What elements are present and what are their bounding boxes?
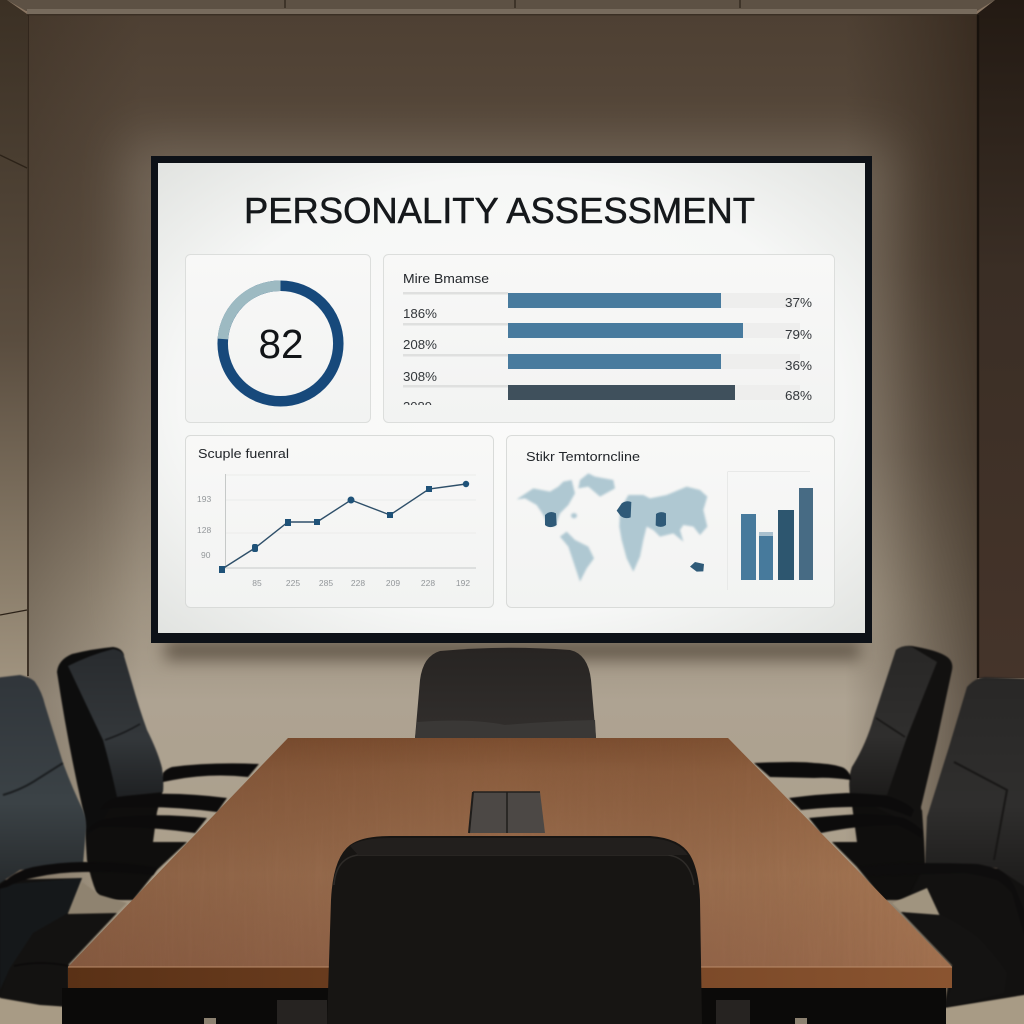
seat back side band xyxy=(57,647,124,835)
mini bar chart xyxy=(728,472,813,590)
data line xyxy=(222,484,466,569)
screen glow and shadow xyxy=(125,140,895,660)
chair: near side centre xyxy=(327,836,702,1024)
y-axis labels: 193 xyxy=(197,494,211,504)
table front edge xyxy=(68,967,952,988)
seat back xyxy=(925,677,1024,890)
chart axes and gridlines xyxy=(226,475,476,533)
arm rest xyxy=(0,862,157,890)
arm rest xyxy=(859,863,1024,955)
chair body underlay xyxy=(0,878,82,1006)
left labels and rules: 186% xyxy=(403,306,437,321)
donut chart xyxy=(223,286,338,401)
chair body underlay xyxy=(901,865,1024,1008)
gap of floor under arm xyxy=(68,882,127,914)
bars heading: Mire Bmamse xyxy=(403,271,489,286)
left labels and rules: 308% xyxy=(403,369,437,384)
bar percentages: 36% xyxy=(785,358,812,373)
under-table shadow and chair bases xyxy=(62,988,946,1024)
bar percentages xyxy=(785,295,812,403)
panel: line chart xyxy=(186,436,494,608)
panel: horizontal bars xyxy=(384,254,834,422)
seat back xyxy=(68,649,163,797)
seat xyxy=(901,912,1007,1008)
score value: 82 xyxy=(258,321,304,367)
chair: right front xyxy=(859,677,1024,1008)
bar fills xyxy=(508,293,743,400)
gap of floor under arm xyxy=(892,888,940,916)
map heading: Stikr Temtorncline xyxy=(526,449,640,464)
panel: world map and mini bars xyxy=(506,436,834,608)
x-axis labels: 85 xyxy=(252,578,262,588)
seat back xyxy=(849,646,952,830)
chair: left front xyxy=(0,675,157,1008)
bar percentages: 37% xyxy=(785,295,812,310)
seat and lower body xyxy=(832,790,926,900)
line chart heading: Scuple fuenral xyxy=(198,446,289,461)
left labels and rules: 2089 xyxy=(403,399,432,414)
bar tracks xyxy=(508,293,800,400)
chair: left rear xyxy=(57,647,259,900)
seat xyxy=(0,913,117,1008)
screen frame xyxy=(151,156,872,643)
conference table xyxy=(60,738,960,988)
seat back xyxy=(0,675,86,887)
left labels and rules xyxy=(403,292,508,414)
seat and lower body xyxy=(83,790,187,900)
left labels and rules: 208% xyxy=(403,337,437,352)
chair: centre far side xyxy=(415,648,596,738)
map markers xyxy=(545,501,704,572)
x-axis labels: 228 xyxy=(421,578,435,588)
screen surface xyxy=(158,163,865,633)
table top xyxy=(68,738,952,967)
x-axis labels: 228 xyxy=(351,578,365,588)
right wall panel xyxy=(977,0,1024,678)
panel: score donut xyxy=(186,254,370,422)
wood grain xyxy=(60,738,960,968)
arm rests xyxy=(754,762,923,838)
y-axis labels: 128 xyxy=(197,525,211,535)
y-axis labels xyxy=(197,494,211,560)
world map xyxy=(517,473,707,582)
bar percentages: 68% xyxy=(785,388,812,403)
x-axis labels: 225 xyxy=(286,578,300,588)
arm rests xyxy=(87,763,259,833)
x-axis labels: 209 xyxy=(386,578,400,588)
lower back xyxy=(0,878,82,990)
title: PERSONALITY ASSESSMENT xyxy=(244,190,755,231)
x-axis labels xyxy=(252,578,470,588)
bar percentages: 79% xyxy=(785,327,812,342)
data points xyxy=(219,481,469,573)
ceiling trim xyxy=(7,0,995,16)
left wall panel xyxy=(0,0,28,680)
cable port xyxy=(469,792,545,833)
x-axis labels: 192 xyxy=(456,578,470,588)
y-axis labels: 90 xyxy=(201,550,211,560)
chair: right rear xyxy=(754,646,952,900)
x-axis labels: 285 xyxy=(319,578,333,588)
floor xyxy=(0,994,1024,1024)
